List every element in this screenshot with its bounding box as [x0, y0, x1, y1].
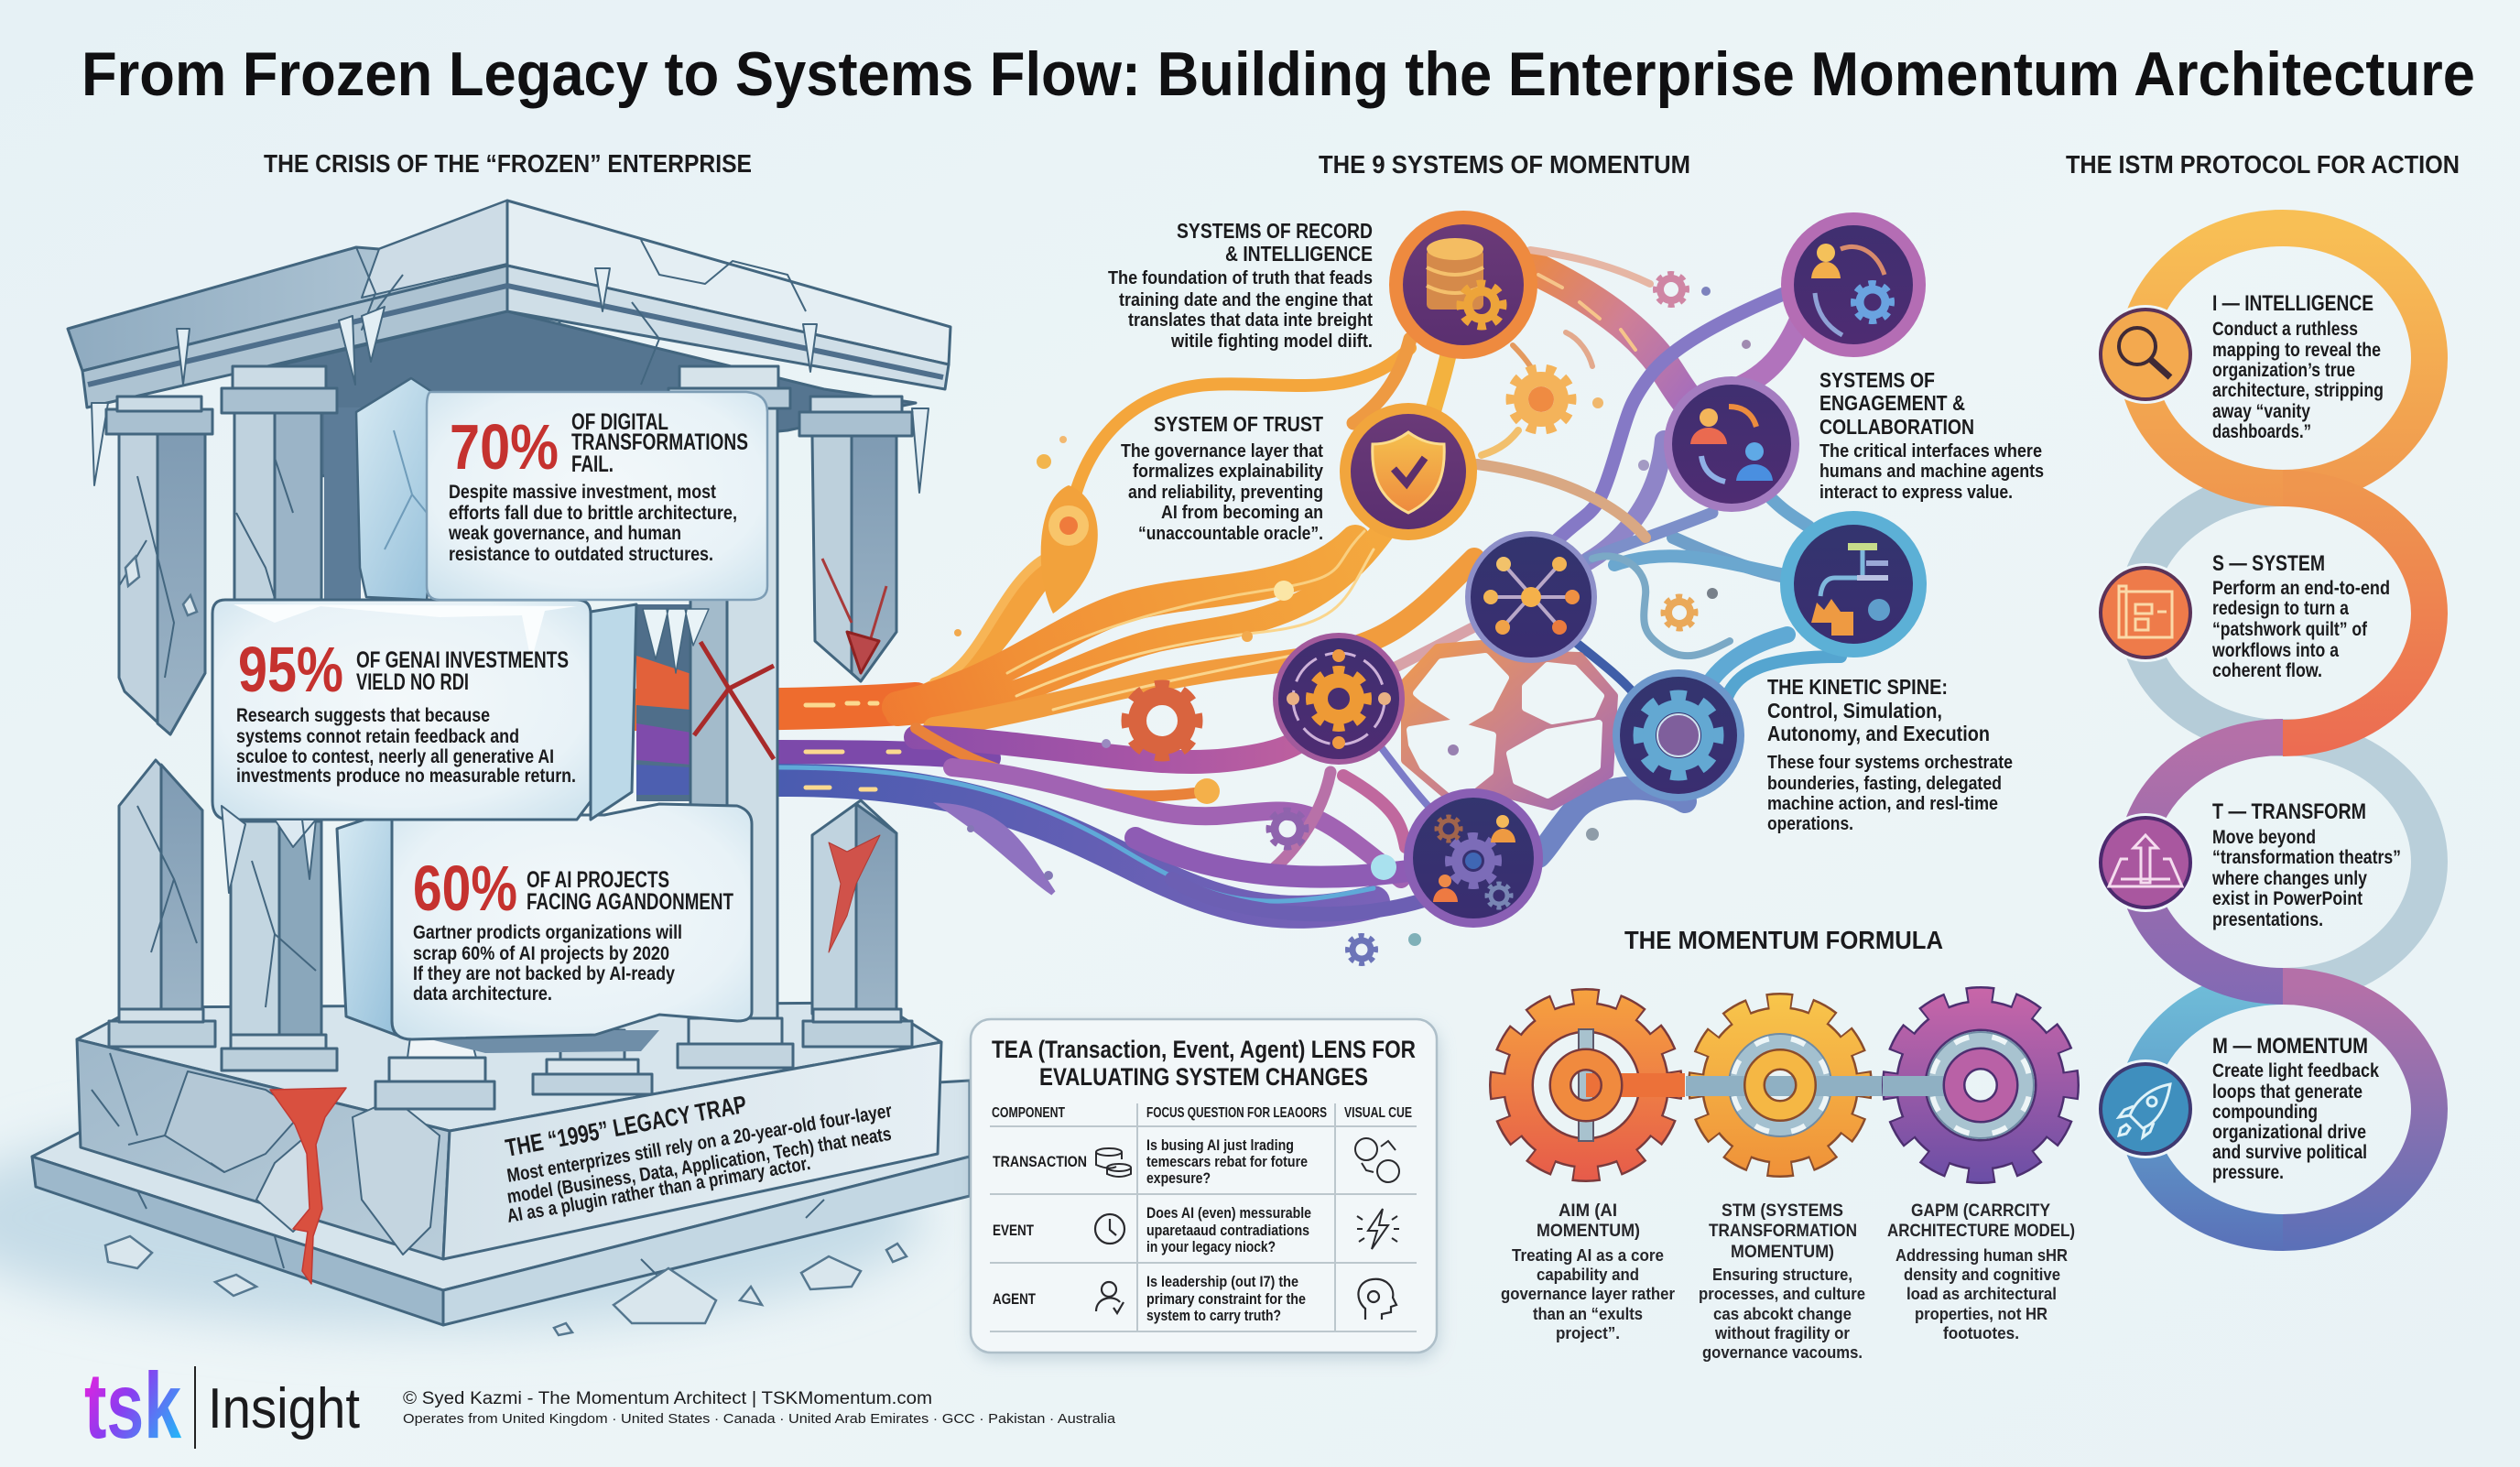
step text: intelligence: Conduct a ruthless	[2212, 319, 2358, 340]
text: STM: without fragility or	[1714, 1323, 1850, 1342]
step text: transform: where changes unly	[2211, 868, 2367, 889]
stat card: 60 percent: 60%	[413, 853, 517, 924]
main horizontal streams	[632, 703, 916, 710]
flow streams network	[632, 250, 1841, 914]
text: systems of record	[1108, 219, 1373, 352]
text: AIM	[1501, 1201, 1675, 1342]
gear: STM	[1686, 1005, 1892, 1166]
text: systems of record: training date and the engine that	[1119, 290, 1373, 310]
text: STM: governance vacoums.	[1702, 1342, 1863, 1362]
stat card: 60 percent	[413, 853, 733, 1005]
step text: intelligence	[2212, 291, 2384, 442]
second column lower	[231, 821, 321, 1041]
text: GAPM: load as architectural	[1906, 1284, 2057, 1303]
small gear: purple	[1269, 810, 1306, 847]
row: agent: AGENT	[993, 1290, 1036, 1308]
frozen temple illustration	[32, 201, 970, 1325]
row: transaction: TRANSACTION	[993, 1153, 1087, 1170]
logo: tsk Insight: tsk	[84, 1353, 181, 1458]
text: engagement and collaboration: humans and machine agents	[1819, 462, 2044, 482]
stat card: 60 percent: scrap 60% of AI projects by 2020	[413, 943, 669, 964]
row: transaction: temescars rebat for foture	[1146, 1153, 1308, 1170]
far-right column lower	[812, 800, 896, 1014]
text: STM: processes, and culture	[1699, 1284, 1865, 1303]
text: kinetic spine: machine action, and resl-time	[1767, 794, 1998, 814]
text: STM: STM (SYSTEMS	[1722, 1201, 1843, 1221]
row: agent: system to carry truth?	[1146, 1307, 1281, 1324]
table header: COMPONENT	[992, 1105, 1065, 1121]
red crack in plinth	[270, 1088, 346, 1284]
stat card: 95 percent	[236, 634, 576, 787]
stat card: 60 percent: Gartner prodicts organizations will	[413, 922, 682, 943]
text: kinetic spine: Autonomy, and Execution	[1767, 722, 1990, 745]
text: system of trust: The governance layer that	[1121, 441, 1323, 462]
text: engagement and collaboration: ENGAGEMENT &	[1819, 391, 1965, 415]
stat card: 70 percent: weak governance, and human	[448, 523, 681, 544]
footer credits	[403, 1389, 1116, 1427]
text: engagement and collaboration	[1819, 368, 2044, 503]
table header: VISUAL CUE	[1344, 1105, 1412, 1121]
text: STM: MOMENTUM)	[1731, 1243, 1834, 1262]
legacy trap text	[504, 1091, 894, 1227]
small gear: orange purple	[1127, 686, 1197, 755]
far-left column lower	[119, 760, 202, 1014]
icon: rocket	[2096, 1060, 2195, 1158]
text: AIM: project”.	[1556, 1323, 1620, 1342]
stat card: 95 percent: systems connot retain feedback and	[236, 726, 519, 747]
table title: TEA (Transaction, Event, Agent) LENS FOR	[992, 1036, 1416, 1063]
step text: intelligence: dashboards.”	[2212, 421, 2311, 442]
far-left column upper	[119, 434, 205, 734]
step text: momentum: loops that generate	[2212, 1081, 2362, 1103]
rubble	[105, 557, 907, 1335]
node: systems of record	[1389, 211, 1537, 359]
ISTM serpentine ribbon	[2136, 228, 2429, 1233]
text: system of trust	[1121, 412, 1324, 544]
text: GAPM: GAPM (CARRCITY	[1911, 1201, 2050, 1221]
step text: momentum: and survive political	[2212, 1142, 2367, 1163]
stat card: 95 percent: OF GENAI INVESTMENTS	[356, 647, 569, 673]
text: kinetic spine	[1767, 675, 2013, 834]
step text: system	[2211, 551, 2390, 681]
text: systems of record: & INTELLIGENCE	[1225, 242, 1373, 266]
text: system of trust: and reliability, preventing	[1128, 483, 1323, 503]
text: system of trust: formalizes explainability	[1133, 462, 1324, 482]
node: system of trust	[1340, 403, 1477, 540]
icicles	[92, 268, 929, 493]
text: engagement and collaboration: COLLABORATION	[1819, 415, 1974, 439]
lower step	[32, 1081, 970, 1290]
row: transaction: Is busing AI just lrading	[1146, 1136, 1294, 1154]
step text: system: S — SYSTEM	[2212, 551, 2325, 576]
step text: intelligence: mapping to reveal the	[2212, 340, 2381, 361]
stat card: 70 percent	[448, 409, 748, 565]
row: event: uparetaaud contradiations	[1146, 1222, 1309, 1239]
text: systems of record: translates that data inte breight	[1128, 310, 1373, 331]
small gear: pink	[1656, 274, 1687, 305]
text: STM	[1699, 1201, 1865, 1362]
text: AIM: AIM (AI	[1559, 1201, 1617, 1221]
step text: transform: Move beyond	[2212, 827, 2316, 848]
row: transaction	[993, 1136, 1399, 1187]
stat card: 95 percent: VIELD NO RDI	[356, 669, 469, 695]
small pedestals	[407, 1007, 476, 1058]
stat card: 95 percent: investments produce no measurable return.	[236, 766, 576, 787]
small gear: gold	[1511, 369, 1571, 429]
step text: system: “patshwork quilt” of	[2212, 619, 2368, 640]
step text: system: Perform an end-to-end	[2212, 578, 2390, 599]
back column	[460, 348, 552, 403]
stat card: 60 percent: data architecture.	[413, 983, 552, 1005]
small gear: indigo	[1348, 936, 1375, 963]
legacy trap text: AI as a plugin rather than a primary actor.	[505, 1153, 812, 1227]
heading: ISTM protocol: THE ISTM PROTOCOL FOR ACTION	[2066, 150, 2460, 179]
decorative dots	[954, 287, 1751, 946]
text: GAPM: Addressing human sHR	[1895, 1245, 2068, 1265]
legacy trap text: Most enterprizes still rely on a 20-year-old four-layer	[505, 1100, 894, 1187]
block 95	[591, 604, 636, 820]
text: AIM: capability and	[1537, 1265, 1639, 1284]
text: GAPM: properties, not HR	[1915, 1304, 2048, 1323]
row: agent: primary constraint for the	[1146, 1290, 1306, 1308]
text: AIM: Treating AI as a core	[1512, 1245, 1664, 1265]
logo: tsk Insight: Insight	[208, 1377, 360, 1440]
stat card: 60 percent: FACING AGANDONMENT	[527, 889, 733, 915]
step text: momentum: M — MOMENTUM	[2212, 1034, 2368, 1059]
text: systems of record: The foundation of truth that feads	[1108, 268, 1373, 288]
step text: transform: T — TRANSFORM	[2212, 799, 2366, 824]
stat card: 70 percent: OF DIGITAL	[571, 409, 668, 435]
text: STM: cas abcokt change	[1713, 1304, 1852, 1323]
row: transaction: expesure?	[1146, 1169, 1211, 1187]
gear: GAPM	[1883, 999, 2067, 1171]
node: engagement top	[1781, 212, 1926, 357]
stat card: 70 percent: Despite massive investment, most	[449, 482, 716, 503]
stat card: 95 percent: sculoe to contest, neerly all generative AI	[236, 746, 554, 767]
text: system of trust: AI from becoming an	[1161, 503, 1323, 523]
node: network hub	[1465, 531, 1597, 663]
logo: tsk Insight	[84, 1353, 360, 1458]
step text: intelligence: I — INTELLIGENCE	[2212, 291, 2373, 316]
step text: system: workflows into a	[2211, 640, 2339, 661]
text: systems of record: witile fighting model diift.	[1170, 331, 1373, 352]
step text: transform: exist in PowerPoint	[2212, 888, 2362, 909]
step text: momentum: Create light feedback	[2212, 1060, 2379, 1081]
table header: FOCUS QUESTION FOR LEAOORS	[1146, 1105, 1327, 1121]
step text: momentum: pressure.	[2212, 1162, 2284, 1183]
dark underside of entablature	[275, 311, 916, 476]
legacy trap text: model (Business, Data, Application, Tech) that neats	[505, 1124, 893, 1208]
step text: intelligence: organization’s true	[2212, 360, 2355, 381]
panel: TEA lens table	[971, 1019, 1439, 1359]
text: AIM: governance layer rather	[1501, 1284, 1675, 1303]
heading: 9 systems: THE 9 SYSTEMS OF MOMENTUM	[1319, 150, 1690, 179]
plinth	[77, 1003, 941, 1131]
text: GAPM: density and cognitive	[1904, 1265, 2060, 1284]
text: engagement and collaboration: The critical interfaces where	[1819, 441, 2042, 462]
mesh between nodes	[1406, 644, 1613, 810]
icon: magnifier	[2096, 305, 2195, 404]
text: AIM: MOMENTUM)	[1537, 1222, 1640, 1241]
text: kinetic spine: bounderies, fasting, delegated	[1767, 774, 2002, 794]
block 70	[356, 378, 449, 600]
table title	[992, 1036, 1416, 1091]
heading: momentum formula: THE MOMENTUM FORMULA	[1624, 926, 1943, 954]
step text: momentum: organizational drive	[2212, 1122, 2366, 1143]
footer credits: © Syed Kazmi - The Momentum Architect | TSKMomentum.com	[403, 1389, 932, 1408]
legacy trap text: THE “1995” LEGACY TRAP	[504, 1091, 749, 1162]
text: kinetic spine: THE KINETIC SPINE:	[1767, 675, 1948, 699]
row: event	[993, 1204, 1399, 1255]
row: event: Does AI (even) messurable	[1146, 1204, 1311, 1222]
far-right column upper	[812, 436, 896, 681]
small gear: amber	[1664, 597, 1695, 628]
shadow under block 60	[394, 1030, 659, 1053]
text: GAPM	[1887, 1201, 2075, 1342]
stat card: 70 percent: efforts fall due to brittle architecture,	[449, 503, 737, 524]
red crack star	[694, 642, 774, 759]
step text: momentum: compounding	[2212, 1102, 2318, 1123]
icon: blueprint	[2096, 563, 2195, 662]
text: kinetic spine: These four systems orchestrate	[1767, 753, 2013, 773]
text: kinetic spine: Control, Simulation,	[1767, 699, 1942, 723]
table header	[992, 1105, 1412, 1121]
step text: intelligence: architecture, stripping	[2212, 380, 2384, 401]
text: system of trust: “unaccountable oracle”.	[1138, 524, 1323, 544]
icicles under block 70	[643, 609, 709, 673]
icon: transform arrow	[2096, 813, 2195, 912]
stat card: 70 percent: TRANSFORMATIONS	[571, 429, 748, 455]
upper connectors	[1430, 339, 1451, 421]
row: event: in your legacy niock?	[1146, 1238, 1276, 1255]
heading: the crisis: THE CRISIS OF THE “FROZEN” ENTERPRISE	[264, 149, 752, 178]
node: orchestrating gear	[1273, 633, 1405, 765]
text: system of trust: SYSTEM OF TRUST	[1154, 412, 1323, 436]
step text: system: coherent flow.	[2212, 660, 2322, 681]
roof	[68, 201, 507, 371]
gear: AIM	[1502, 1001, 1685, 1169]
stat card: 70 percent: resistance to outdated structures.	[449, 544, 713, 565]
step text: transform: presentations.	[2212, 909, 2323, 930]
step text: system: redesign to turn a	[2212, 598, 2349, 619]
step text: transform: “transformation theatrs”	[2212, 847, 2401, 868]
node: engagement and collaboration	[1664, 376, 1799, 512]
text: GAPM: footuotes.	[1943, 1323, 2019, 1342]
text: GAPM: ARCHITECTURE MODEL)	[1887, 1222, 2075, 1241]
text: STM: TRANSFORMATION	[1709, 1222, 1857, 1241]
text: engagement and collaboration: interact to express value.	[1819, 483, 2013, 503]
source blob	[1041, 485, 1098, 614]
table title: EVALUATING SYSTEM CHANGES	[1039, 1063, 1368, 1091]
second column upper	[234, 413, 321, 614]
stat card: 60 percent: If they are not backed by AI-ready	[413, 963, 675, 984]
stream highlights	[806, 703, 899, 789]
row: agent	[993, 1273, 1396, 1324]
text: kinetic spine: operations.	[1767, 814, 1853, 834]
step text: momentum	[2212, 1034, 2379, 1183]
row: event: EVENT	[993, 1222, 1034, 1239]
text: STM: Ensuring structure,	[1712, 1265, 1852, 1284]
text: engagement and collaboration: SYSTEMS OF	[1819, 368, 1935, 392]
node: people and gears	[1404, 788, 1543, 928]
step text: transform	[2211, 799, 2401, 930]
stat card: 95 percent: Research suggests that because	[236, 705, 490, 726]
block 60	[337, 810, 407, 1039]
node: kinetic spine	[1780, 511, 1927, 657]
blue right connectors	[1614, 556, 1818, 580]
text: systems of record: SYSTEMS OF RECORD	[1177, 219, 1373, 243]
stat card: 60 percent: OF AI PROJECTS	[527, 867, 669, 893]
stat card: 95 percent: 95%	[238, 634, 343, 705]
right-center column	[690, 408, 777, 1040]
step text: intelligence: away “vanity	[2212, 401, 2310, 422]
text: AIM: than an “exults	[1533, 1304, 1643, 1323]
footer credits: Operates from United Kingdom · United States · Canada · United Arab Emirates · GCC · Pakistan · Australia	[403, 1411, 1116, 1427]
plinth fractured rock	[165, 1071, 302, 1172]
stat card: 70 percent: FAIL.	[571, 451, 614, 477]
node: blue gear	[1613, 669, 1744, 801]
row: agent: Is leadership (out I7) the	[1146, 1273, 1298, 1290]
stat card: 70 percent: 70%	[450, 411, 559, 483]
